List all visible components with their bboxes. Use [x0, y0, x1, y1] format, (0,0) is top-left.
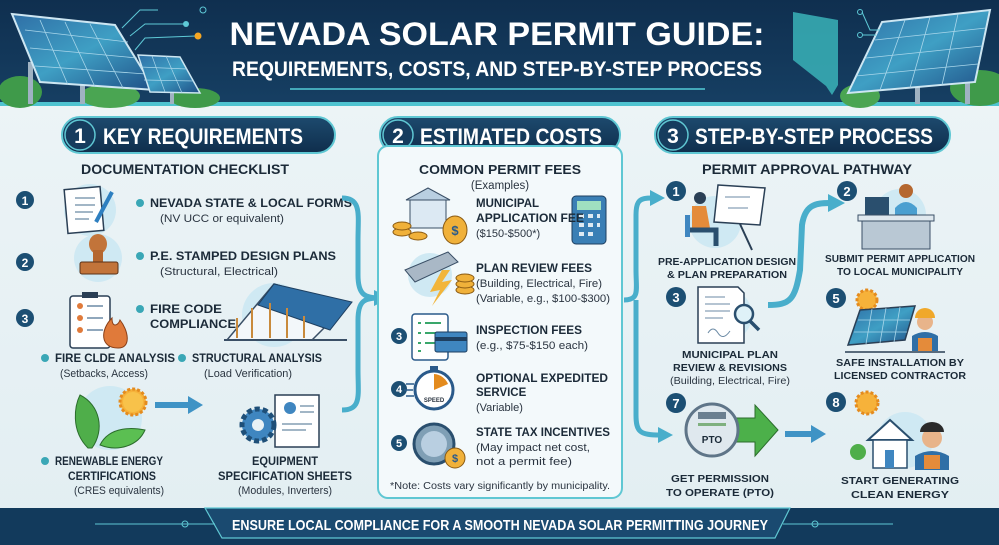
- item 2: stamped plans: 2: [22, 256, 29, 270]
- item: renewable certifications: RENEWABLE ENERGY: [55, 456, 163, 468]
- section header: 1 key requirements: 1: [74, 125, 86, 148]
- fee: expedited service: (Variable): [476, 402, 523, 414]
- arrow: leaf to gear: [155, 396, 203, 414]
- fee: expedited service: 4: [396, 384, 403, 396]
- item 1: forms: (NV UCC or equivalent): [160, 213, 284, 225]
- fee: inspection: 3: [396, 331, 402, 343]
- fee: state tax incentives: (May impact net cost,: [476, 442, 590, 454]
- fee: inspection: (e.g., $75-$150 each): [476, 340, 588, 352]
- item: equipment specification sheets: [218, 456, 352, 497]
- icon: left solar panels: [0, 7, 220, 108]
- item: renewable certifications: (CRES equivalents): [74, 485, 164, 497]
- step 2: TO LOCAL MUNICIPALITY: [837, 266, 963, 278]
- step 8: CLEAN ENERGY: [851, 489, 949, 501]
- section header: 1 key requirements: [62, 117, 335, 153]
- step 7: PTO: [702, 435, 722, 446]
- item 2: stamped plans: [16, 234, 336, 282]
- step 2: 2: [843, 184, 851, 199]
- fee: inspection: [391, 314, 588, 360]
- fee: state tax incentives: 5: [396, 438, 402, 450]
- item: equipment specification sheets: EQUIPMENT: [252, 456, 318, 468]
- step 3: [666, 287, 790, 387]
- step 1: & PLAN PREPARATION: [667, 269, 787, 281]
- fee: municipal application: APPLICATION FEE: [476, 213, 584, 225]
- step 7: [666, 393, 778, 499]
- step 8: START GENERATING: [841, 475, 959, 487]
- icon: leaf and sun: [75, 386, 146, 450]
- header banner: [0, 0, 999, 108]
- fee: state tax incentives: [391, 424, 610, 468]
- item: fire code analysis: FIRE CLDE ANALYSIS: [55, 353, 175, 365]
- fee: plan review: (Building, Electrical, Fire): [476, 278, 602, 290]
- item 1: forms: [16, 184, 352, 236]
- step 1: 1: [672, 184, 680, 199]
- icon: Nevada map: [793, 12, 838, 95]
- fee: expedited service: [391, 366, 608, 414]
- section header: 2 estimated costs: [380, 117, 620, 153]
- fee: municipal application: [393, 188, 606, 244]
- fee: municipal application: $: [451, 223, 459, 238]
- item 1: forms: NEVADA STATE & LOCAL FORMS: [150, 198, 352, 210]
- section header: 2 estimated costs: ESTIMATED COSTS: [420, 124, 602, 149]
- fee: inspection: INSPECTION FEES: [476, 325, 582, 337]
- arrow: bracket into costs panel: [342, 198, 390, 410]
- item: equipment specification sheets: SPECIFICATION SHEETS: [218, 471, 352, 483]
- step 1: [658, 181, 796, 281]
- panel: key requirements: [16, 162, 352, 497]
- step 5: [826, 288, 966, 382]
- step 5: 5: [832, 291, 840, 306]
- section header: 3 step-by-step: [655, 117, 950, 153]
- heading: permit approval pathway: PERMIT APPROVAL PATHWAY: [702, 162, 912, 177]
- item: renewable certifications: CERTIFICATIONS: [68, 471, 156, 483]
- arrow: costs to process: [624, 190, 673, 443]
- item: structural analysis: (Load Verification): [204, 368, 292, 380]
- fee: expedited service: SPEED: [424, 398, 445, 404]
- fee: state tax incentives: $: [452, 453, 458, 465]
- item: renewable certifications: [41, 456, 164, 497]
- step 3: MUNICIPAL PLAN: [682, 349, 778, 361]
- section header: 3 step-by-step: 3: [667, 125, 679, 148]
- fee: state tax incentives: not a permit fee): [476, 456, 572, 468]
- step 8: [826, 392, 959, 501]
- fee: plan review: [405, 252, 610, 306]
- heading: documentation checklist: DOCUMENTATION CHECKLIST: [81, 162, 290, 177]
- step 3: 3: [672, 290, 680, 305]
- step 3: (Building, Electrical, Fire): [670, 376, 790, 387]
- step 2: SUBMIT PERMIT APPLICATION: [825, 253, 975, 265]
- item: fire code analysis: (Setbacks, Access): [60, 368, 148, 380]
- icon: house with solar roof: [224, 283, 352, 347]
- fee: municipal application: MUNICIPAL: [476, 198, 539, 210]
- panel: estimated costs: [378, 146, 622, 498]
- step 7: TO OPERATE (PTO): [666, 487, 774, 499]
- arrow: step 7 to step 8: [785, 425, 826, 443]
- step 1: PRE-APPLICATION DESIGN: [658, 256, 796, 268]
- section header: 3 step-by-step: STEP-BY-STEP PROCESS: [695, 124, 933, 149]
- icon: right solar panel: [840, 10, 999, 108]
- item: equipment specification sheets: (Modules, Inverters): [238, 485, 332, 497]
- panel: estimated costs: (Examples): [471, 180, 529, 192]
- arrow: step 3 to step 2: [768, 194, 845, 305]
- step 5: LICENSED CONTRACTOR: [834, 370, 966, 382]
- step 8: 8: [832, 395, 840, 410]
- title: [230, 16, 764, 90]
- item: fire code analysis: [41, 353, 175, 380]
- section header: 2 estimated costs: 2: [392, 125, 404, 148]
- icon: gear and spec sheet: [242, 395, 319, 447]
- fee: municipal application: ($150-$500*): [476, 228, 540, 240]
- step 3: REVIEW & REVISIONS: [673, 362, 787, 374]
- item: structural analysis: [178, 353, 322, 380]
- step 5: SAFE INSTALLATION BY: [836, 357, 964, 369]
- item 3: fire code: 3: [22, 312, 29, 326]
- footer banner: ENSURE LOCAL COMPLIANCE FOR A SMOOTH NEVADA SOLAR PERMITTING JOURNEY: [232, 517, 768, 534]
- item 3: fire code: COMPLIANCE: [150, 319, 236, 331]
- section header: 1 key requirements: KEY REQUIREMENTS: [103, 124, 303, 149]
- fee: expedited service: SERVICE: [476, 387, 527, 399]
- fee: state tax incentives: STATE TAX INCENTIVES: [476, 427, 610, 439]
- item: structural analysis: STRUCTURAL ANALYSIS: [192, 353, 322, 365]
- item 2: stamped plans: P.E. STAMPED DESIGN PLANS: [150, 251, 336, 263]
- panel: step-by-step process: [658, 162, 975, 501]
- title: NEVADA SOLAR PERMIT GUIDE:: [230, 16, 764, 52]
- item 3: fire code: [16, 292, 236, 348]
- step 7: GET PERMISSION: [671, 473, 769, 485]
- item 1: forms: 1: [22, 194, 29, 208]
- step 7: 7: [672, 396, 680, 411]
- step 2: [825, 181, 975, 278]
- heading: common permit fees: COMMON PERMIT FEES: [419, 162, 581, 177]
- fee: plan review: (Variable, e.g., $100-$300): [476, 293, 610, 305]
- footer banner: [0, 508, 999, 545]
- fee: expedited service: OPTIONAL EXPEDITED: [476, 373, 608, 385]
- note: *Note: Costs vary significantly by municipality.: [390, 480, 610, 492]
- item 3: fire code: FIRE CODE: [150, 304, 222, 316]
- fee: plan review: PLAN REVIEW FEES: [476, 263, 592, 275]
- item 2: stamped plans: (Structural, Electrical): [160, 266, 278, 278]
- title: REQUIREMENTS, COSTS, AND STEP-BY-STEP PROCESS: [232, 58, 762, 81]
